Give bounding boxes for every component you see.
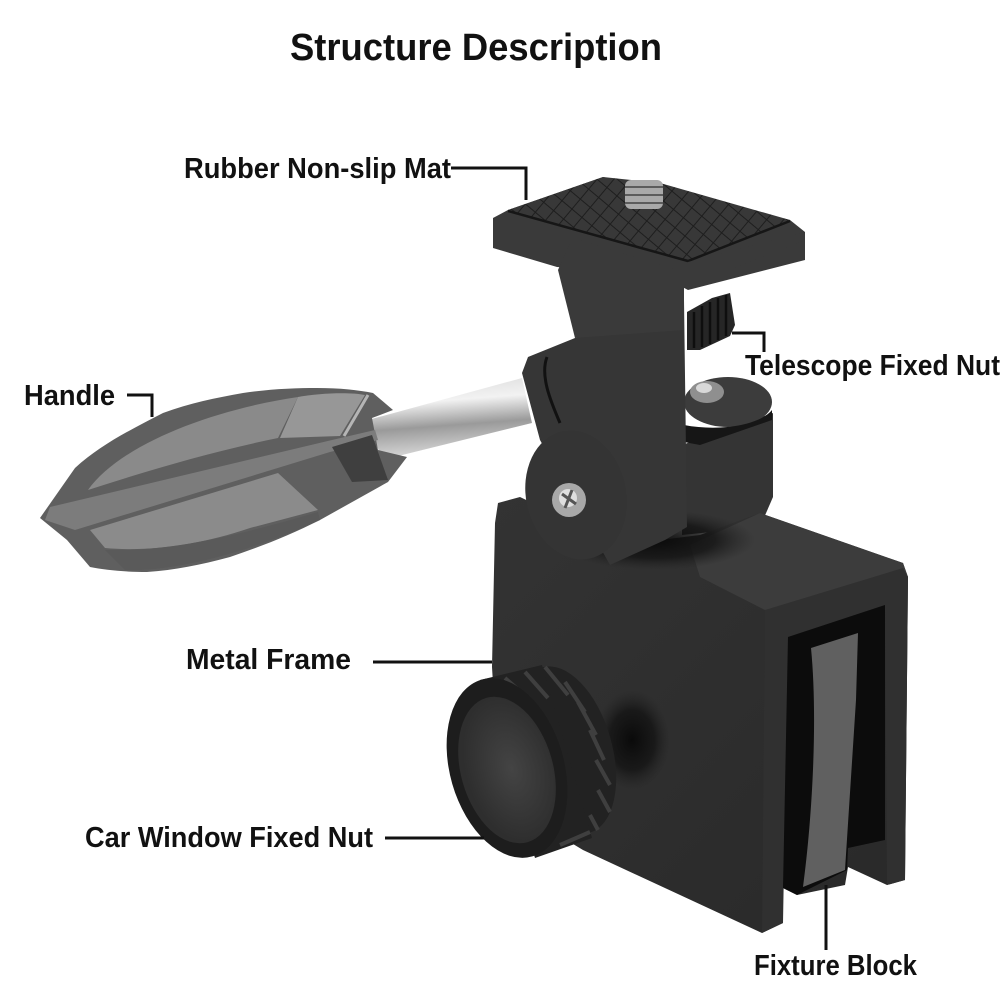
icon: rubber non-slip plate	[493, 177, 805, 290]
icon: arm slit	[545, 357, 560, 423]
icon: fixture block	[783, 605, 885, 895]
label: handle	[24, 380, 152, 417]
icon: metal rod	[368, 378, 532, 460]
icon: top bracket	[558, 232, 805, 338]
label: rubber non-slip mat: Rubber Non-slip Mat	[184, 153, 451, 185]
label: rubber non-slip mat	[184, 153, 526, 200]
label: car window fixed nut: Car Window Fixed Nut	[85, 822, 373, 854]
title: Structure Description	[290, 27, 662, 69]
icon: metal frame	[492, 497, 908, 933]
icon: handle	[40, 388, 407, 572]
label: handle: Handle	[24, 380, 115, 412]
icon: car window fixed nut	[427, 655, 634, 872]
icon: ball head	[682, 377, 773, 535]
label: fixture block: Fixture Block	[754, 950, 918, 982]
label: telescope fixed nut	[732, 333, 1000, 382]
icon: pivot disc with screw	[514, 421, 638, 569]
icon: pivot arm	[522, 300, 687, 565]
label: metal frame: Metal Frame	[186, 644, 351, 676]
icon: telescope fixed nut	[687, 293, 735, 350]
icon: threaded stud	[625, 180, 663, 209]
